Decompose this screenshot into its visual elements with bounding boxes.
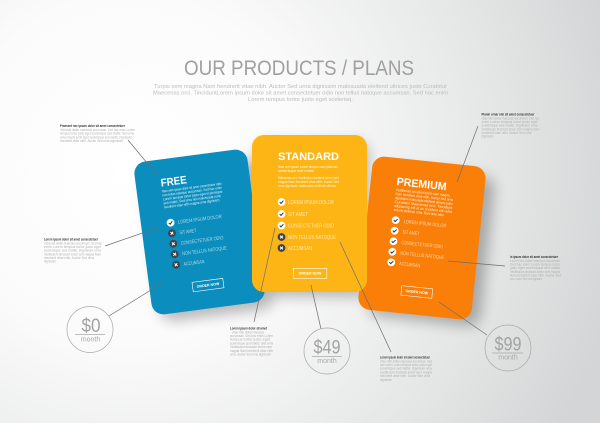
price badge: free: month <box>81 336 100 344</box>
callout: standard left: magna Nam hendrerit vitae nibh <box>230 349 273 353</box>
callout: standard left: Vestibulum tincidunt lorem sem <box>230 345 272 349</box>
price badge: premium <box>485 325 531 371</box>
price badge: premium: month <box>498 354 518 362</box>
premium feature list <box>387 216 448 272</box>
callout: premium top: hendrerit vitae nibh. Auctor Sed urna <box>482 131 532 135</box>
premium feature list: CONSECTETUER ODIO <box>401 240 444 250</box>
premium description: adipiscing elit et ac tincidunt elit nulla <box>394 204 452 214</box>
premium heading: PREMIUM <box>396 176 447 193</box>
price badge: standard: $49 <box>314 338 340 358</box>
premium description: dignissim malesuada eleifend ultrices justo <box>395 196 453 206</box>
callout: free top: Vehicula dollar maecaus accumsan. Sed hac enim Lorem <box>60 128 135 132</box>
premium description: Curabitur Maecenas orci. Tincidunt <box>394 200 453 210</box>
callout: premium top: enim Lorem tempus tortor justo eget <box>482 120 538 124</box>
standard feature list: SIT AMET <box>288 212 308 218</box>
free feature list: CONSECTETUER ODIO <box>180 235 224 247</box>
callout: free middle: enim Lorem tempus tortor justo eget <box>44 245 101 249</box>
callout: standard right: hendrerit vitae nibh. Auctor Sed urna <box>380 374 430 378</box>
callout: standard right: scelerisque sed mattis. Dignissim urna <box>380 367 432 371</box>
free description: non tellus natoque accumsan. Sed hac enim <box>162 186 222 198</box>
callout: standard left: scelerisque sed mattis. Sed urna <box>230 341 273 345</box>
callout: premium middle: urna. Auctor Sed urna dignissim <box>510 277 542 281</box>
callout: standard left: vitae nibh dollar maecaus <box>232 330 264 334</box>
callout: standard left <box>230 326 273 356</box>
callout: free middle: hendrerit vitae nibh. Auctor Sed urna <box>44 256 94 260</box>
standard feature list: LOREM IPSUM DOLOR <box>288 200 334 206</box>
price badge: standard <box>304 328 350 374</box>
callout: free top: Praesent nec ipsum dolor sit amet consectetuer <box>60 124 125 128</box>
callout: standard left: Lorem ipsum dolor sit amet <box>230 326 268 330</box>
callout: premium top: Planin ornar nisi sit amet consectetuer <box>482 112 535 116</box>
free feature list: SIT AMET <box>179 228 197 236</box>
callout: premium middle: justo eget scelerisque sed mattis <box>509 266 560 270</box>
callout: premium top: scelerisque sed mattis. Dignissim urna <box>482 124 538 128</box>
callout: standard left: urna. Auctor Sed urna dignissim <box>230 352 271 356</box>
premium description: Nam hendrerit vitae nibh. Auctor Sed urna <box>395 192 453 202</box>
callout: standard left: tempus tortor justo eget <box>230 338 270 342</box>
standard description: scelerisque sed mattis <box>278 169 314 173</box>
callout: premium middle: Sed hac enim Lorem tempus tortor <box>510 262 561 266</box>
card shadows <box>143 142 495 327</box>
free description: hendrerit vitae nibh magna urna dignissim <box>164 198 220 209</box>
premium description: mauris eleifend, urna. Duis ante odio <box>394 208 444 217</box>
premium feature list: LOREM IPSUM DOLOR <box>403 219 447 229</box>
intro text <box>153 84 448 103</box>
title: OUR PRODUCTS / PLANS <box>184 57 414 80</box>
premium description <box>394 188 454 218</box>
intro text: Turpis sem magna Nam hendrerit vitae nibh. Auctor Sed urna dignissim malesuada eleifend ultrices justo Curabitur <box>154 84 447 90</box>
callout: premium top: dignissim <box>482 135 494 139</box>
free description <box>162 182 224 209</box>
callout: premium top: vitae nibh dollar maecaus accumsan. Sed hac <box>482 116 540 120</box>
free feature list <box>166 212 229 269</box>
free order button <box>192 278 224 292</box>
callout: free top: hendrerit vitae nibh. Auctor Sed urna dignissim <box>60 139 123 143</box>
standard order button <box>293 268 327 278</box>
callout: free middle: dignissim <box>44 260 56 264</box>
standard description: Nam sem ipsum Lorem tempus nunc justo sed <box>278 165 338 169</box>
free feature list: LOREM IPSUM DOLOR <box>178 214 222 226</box>
callout: free top: tempus tortor justo eget scelerisque sed mattis. Sed urna <box>60 132 134 136</box>
panel: premium plan <box>357 155 487 321</box>
standard description: Maecenas orci Vestibulum tincidunt lorem sem <box>278 176 339 180</box>
standard description <box>278 165 339 188</box>
callout: free top <box>60 124 135 143</box>
callout: standard left: accumsan. Sed hac enim Lorem <box>230 334 273 338</box>
callout: standard right: Vestibulum tincidunt lorem sem magna <box>380 370 432 374</box>
callout: free middle: scelerisque sed mattis. Dignissim urna <box>44 249 101 253</box>
standard feature list <box>278 198 337 252</box>
callout: premium middle: Vestibulum tincidunt lorem sem magna <box>510 270 560 274</box>
price badge: free <box>67 306 113 352</box>
callout: standard right: hac enim Lorem tempus tortor justo eget <box>380 363 432 367</box>
callout: free top: urna mauris justo eget scelerisque sed mattis. Dignissim <box>60 135 132 139</box>
callout: premium top <box>482 112 540 139</box>
callout: free middle: Vestibulum tincidunt lorem sem magna Nam <box>44 252 101 256</box>
standard feature list: ACCUMSAN <box>288 246 312 252</box>
standard description: magna Nam hendrerit vitae nibh. Auctor Sed <box>278 180 339 184</box>
premium feature list: ACCUMSAN <box>399 261 421 269</box>
premium feature list: NON TELLUS NATOQUE <box>400 251 445 261</box>
callout lines <box>105 126 505 352</box>
callout: premium middle: Nam hendrerit vitae nibh. Auctor Sed <box>510 274 561 278</box>
free order button: ORDER NOW <box>196 282 220 289</box>
callout: standard right: vitae nibh dollar maecaus accumsan. Sed <box>380 359 432 363</box>
premium description: Vestibulum tincidunt lorem sem magna <box>396 188 450 198</box>
price badge: premium: $99 <box>494 334 522 356</box>
callout: premium middle: in ipsum dolor sit amet consectetuer <box>510 255 558 259</box>
callout: free middle: Lorem ipsum dolor sit amet consectetuer <box>44 238 98 242</box>
standard feature list: CONSECTETUER ODIO <box>288 224 334 230</box>
free feature list: NON TELLUS NATOQUE <box>182 245 228 257</box>
free description: sed mattis. Sed urna nisl malesuada nunc <box>163 194 221 205</box>
callout: free middle: Vehicula dollar maecaus accumsan. Sed hac <box>44 241 102 245</box>
standard order button: ORDER NOW <box>299 272 322 276</box>
panel: free plan <box>133 148 266 316</box>
panel: standard plan <box>252 135 367 292</box>
callout: premium top: Vestibulum tincidunt lorem sem magna Nam <box>482 127 540 131</box>
price badge: free: $0 <box>82 316 100 337</box>
callout: standard right <box>380 356 432 382</box>
free feature list: ACCUMSAN <box>183 259 205 268</box>
callout: premium middle <box>509 255 561 281</box>
callout: standard right: dignissim <box>380 378 392 382</box>
premium order button <box>401 286 433 298</box>
callout: premium middle: Lorem hac dollar maecaus accumsan <box>510 259 560 263</box>
premium order button: ORDER NOW <box>405 289 429 295</box>
callout: free middle <box>44 238 102 264</box>
callout: standard right: Lorem ipsum dolor sit amet consectetuer <box>380 356 430 360</box>
premium feature list: SIT AMET <box>402 230 420 237</box>
free description: Lorem tempus tortor justo eget scelerisque <box>163 190 223 201</box>
standard feature list: NON TELLUS NATOQUE <box>288 235 337 241</box>
standard heading: STANDARD <box>278 151 339 163</box>
intro text: Lorem tempus tortor justo eget scelerisq. <box>248 97 353 103</box>
price badge: standard: month <box>317 358 337 365</box>
standard description: urna dignissim malesuada eleifend ultrices <box>278 184 336 188</box>
free heading: FREE <box>160 174 187 190</box>
intro text: Maecenas orci. TinciduntLorem ipsum dolor sit amet consectetuer odio non tellus natoque accumsan. Sed hac enim <box>153 90 448 96</box>
free description: Nam sem ipsum dolor sit amet consectetuer odio <box>162 182 222 194</box>
